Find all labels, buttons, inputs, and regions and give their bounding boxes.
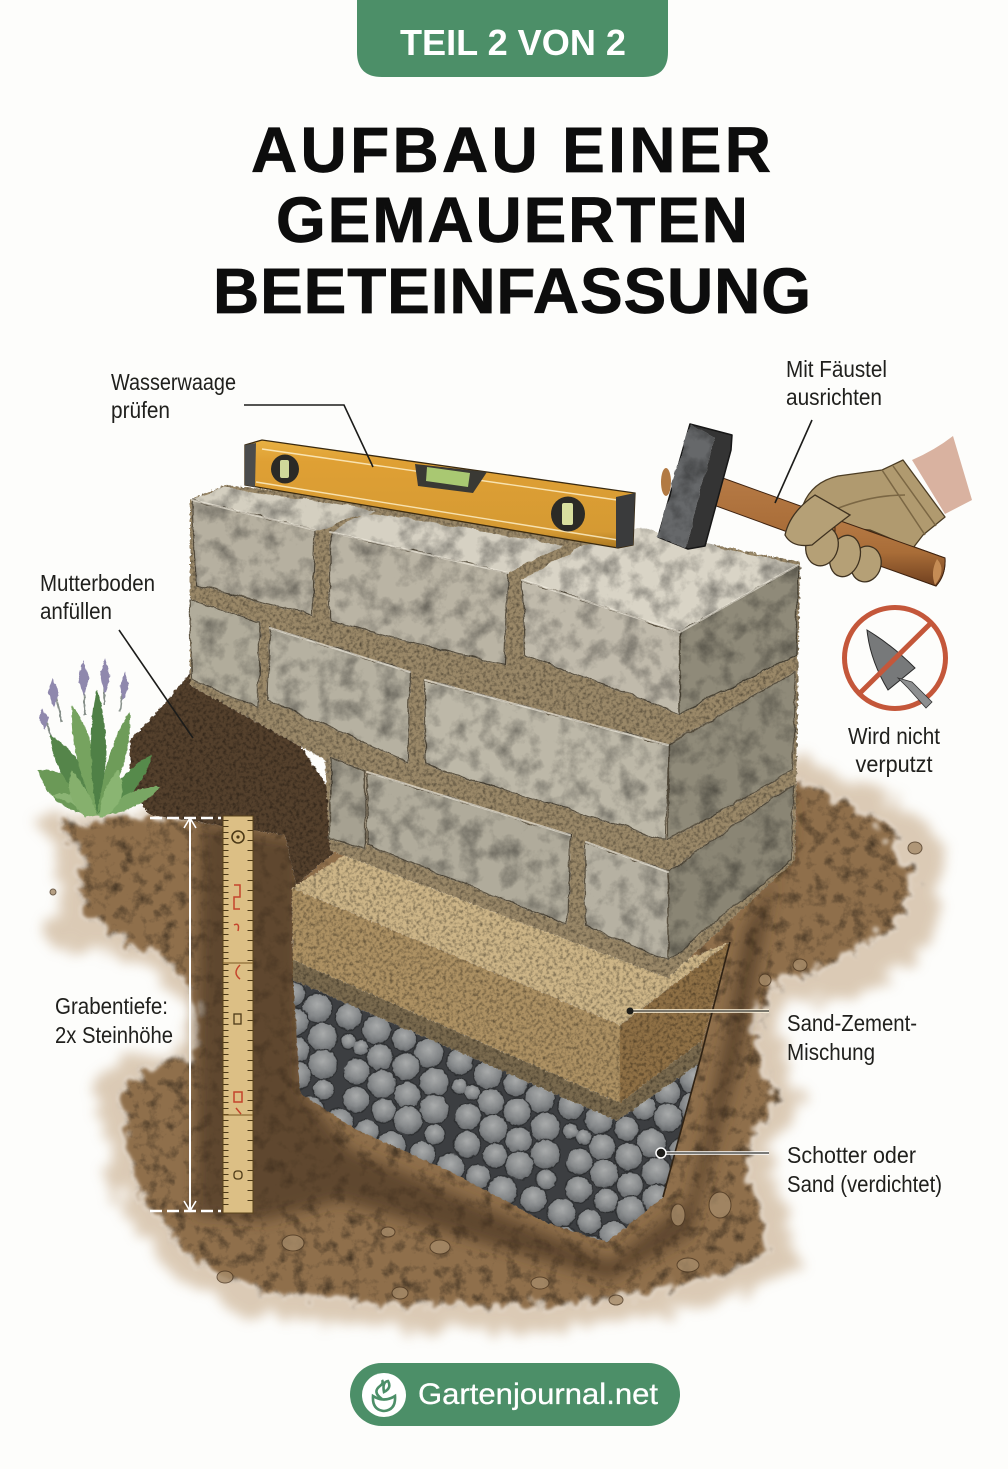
- stone: top row left: [192, 488, 375, 615]
- sand layer: dark band: [293, 955, 703, 1121]
- label: Schotter: Sand (verdichtet): [787, 1171, 942, 1197]
- gloved hand: [785, 436, 972, 586]
- mortar body: [190, 485, 800, 978]
- label: Fäustel: Mit Fäustel: [786, 356, 887, 382]
- soil: scattered pebbles: [50, 842, 922, 1305]
- footer brand pill: Gartenjournal.net: [418, 1378, 659, 1411]
- label: Fäustel: [775, 356, 887, 503]
- title: GEMAUERTEN: [276, 184, 748, 256]
- label: Mutterboden: anfüllen: [40, 598, 112, 624]
- label: Grabentiefe: Grabentiefe:: [55, 993, 168, 1019]
- sand layer: top face: [292, 855, 730, 1025]
- stone: top row right: [522, 528, 798, 713]
- label: Wird nicht verputzt: [848, 723, 941, 777]
- stone: top row middle: [330, 512, 563, 665]
- label: Wasserwaage: Wasserwaage: [111, 369, 236, 395]
- hammer head: [658, 424, 732, 549]
- label: Mutterboden: Mutterboden: [40, 570, 155, 596]
- stone: middle row: [190, 600, 796, 840]
- title: [213, 114, 811, 327]
- trowel icon: [867, 630, 915, 690]
- glove back: [803, 460, 945, 548]
- stone wall: [190, 485, 800, 978]
- label: Sand-Zement: [626, 1008, 917, 1065]
- label: Wasserwaage: [111, 369, 373, 467]
- folding ruler: [223, 816, 253, 1213]
- sand layer: front face: [292, 888, 620, 1103]
- forearm: [912, 436, 972, 514]
- hammer handle: [708, 477, 945, 586]
- label: Mutterboden: [40, 570, 193, 738]
- stone: lower row: [330, 757, 793, 960]
- central vial: [415, 464, 487, 493]
- label: Wasserwaage: prüfen: [111, 397, 170, 423]
- label: Fäustel: ausrichten: [786, 384, 882, 410]
- label: Sand-Zement: Mischung: [787, 1039, 875, 1065]
- soil ground cross-section: [35, 745, 945, 1330]
- part badge: TEIL 2 VON 2: [400, 22, 626, 63]
- label: Schotter: [656, 1142, 942, 1197]
- topsoil mound: [130, 672, 337, 885]
- logo icon: [362, 1373, 406, 1417]
- depth dimension: [150, 818, 221, 1211]
- label: Grabentiefe: 2x Steinhöhe: [55, 1022, 173, 1048]
- hammer back nub: [661, 468, 671, 496]
- no-plastering sign: [844, 608, 946, 708]
- fingers: [785, 495, 885, 585]
- label: Grabentiefe: [55, 993, 173, 1048]
- label: Sand-Zement: Sand-Zement-: [787, 1010, 917, 1036]
- round vials: [271, 454, 299, 484]
- label: Wird nicht verputzt: Wird nicht: [848, 723, 941, 749]
- hammer: [658, 424, 945, 586]
- stone edge highlights: [192, 500, 798, 872]
- plant: lavender: [38, 658, 160, 817]
- gravel layer: [293, 978, 700, 1242]
- sand-cement layer: [292, 855, 730, 1197]
- label: Schotter: Schotter oder: [787, 1142, 916, 1168]
- part badge: [357, 0, 668, 77]
- sand layer: side face: [620, 942, 730, 1103]
- soil: main body: [58, 770, 915, 1308]
- handle over palm: [835, 519, 945, 586]
- title: AUFBAU EINER: [251, 114, 771, 186]
- title: BEETEINFASSUNG: [213, 255, 811, 327]
- footer brand pill: [350, 1363, 680, 1426]
- soil: pale washed edge: [35, 745, 945, 1330]
- soil: dark trench shadow: [195, 790, 795, 1280]
- spirit level: [245, 440, 635, 548]
- label: Wird nicht verputzt: verputzt: [856, 751, 933, 777]
